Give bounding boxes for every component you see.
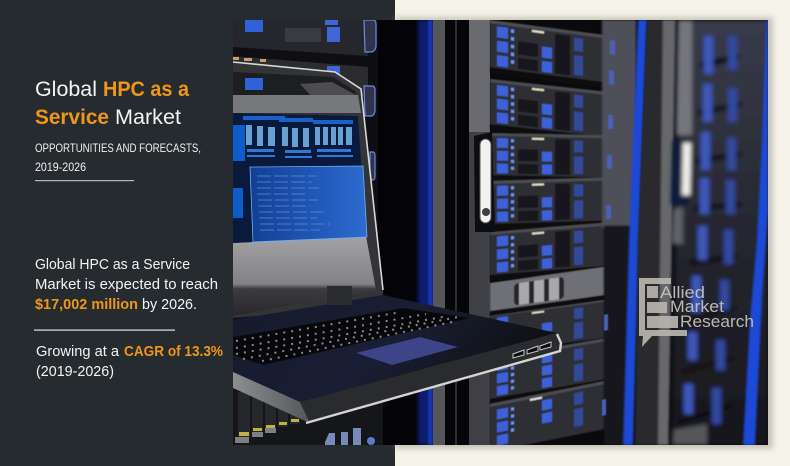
silver rails unit	[490, 267, 605, 316]
server rack: centre	[490, 20, 605, 452]
server door handle	[474, 132, 495, 232]
panel: dark left side	[0, 0, 395, 466]
trackpad	[356, 337, 458, 365]
laptop lid bezel	[233, 62, 383, 318]
heading: Service	[35, 105, 109, 129]
server blades, lower left	[235, 392, 383, 445]
text block: CAGR: (2019-2026)	[36, 363, 114, 380]
text block: market size: $17,002 million	[35, 296, 138, 313]
logo: Allied Market Research watermark	[639, 278, 754, 347]
subheading	[35, 141, 201, 174]
laptop	[233, 62, 561, 423]
text block: market size: Global HPC as a Service	[35, 256, 190, 273]
right blue strip	[743, 20, 768, 445]
silver left lip	[233, 372, 310, 423]
logo: Allied Market Research watermark: Allied	[660, 283, 705, 302]
photo shadow	[395, 17, 773, 449]
rack left, behind laptop	[233, 20, 377, 181]
heading: HPC as a	[103, 77, 190, 101]
laptop screen	[233, 113, 367, 243]
text block: market size: Market is expected to reach	[35, 276, 218, 293]
logo: Allied Market Research watermark: Research	[680, 312, 754, 331]
logo: Allied Market Research watermark: Market	[670, 297, 724, 316]
heading: Market	[115, 105, 181, 129]
server rack: right, blurred	[671, 20, 768, 445]
photo: server room with laptop	[233, 20, 768, 452]
rack side gray column and first blue strip	[602, 20, 647, 445]
text block: CAGR: Growing at a	[36, 343, 120, 360]
keyboard well	[233, 308, 470, 365]
lid highlight edge	[233, 62, 383, 290]
text block: CAGR: CAGR of 13.3%	[124, 343, 223, 360]
rack posts and gap	[416, 20, 490, 445]
gray posts, right	[635, 20, 680, 445]
rack handles	[364, 20, 376, 180]
text block: market size	[35, 256, 218, 313]
hinge	[327, 286, 352, 305]
subheading: OPPORTUNITIES AND FORECASTS,	[35, 141, 201, 155]
heading	[35, 77, 190, 129]
front lip	[300, 333, 561, 423]
console panel	[250, 166, 367, 242]
keyboard deck	[233, 295, 557, 402]
keyboard keys	[236, 312, 458, 361]
heading: Global	[35, 77, 97, 101]
text block: market size: by 2026.	[142, 296, 197, 313]
subheading: 2019-2026	[35, 160, 86, 174]
text block: CAGR	[36, 343, 223, 380]
USB ports	[513, 342, 551, 358]
